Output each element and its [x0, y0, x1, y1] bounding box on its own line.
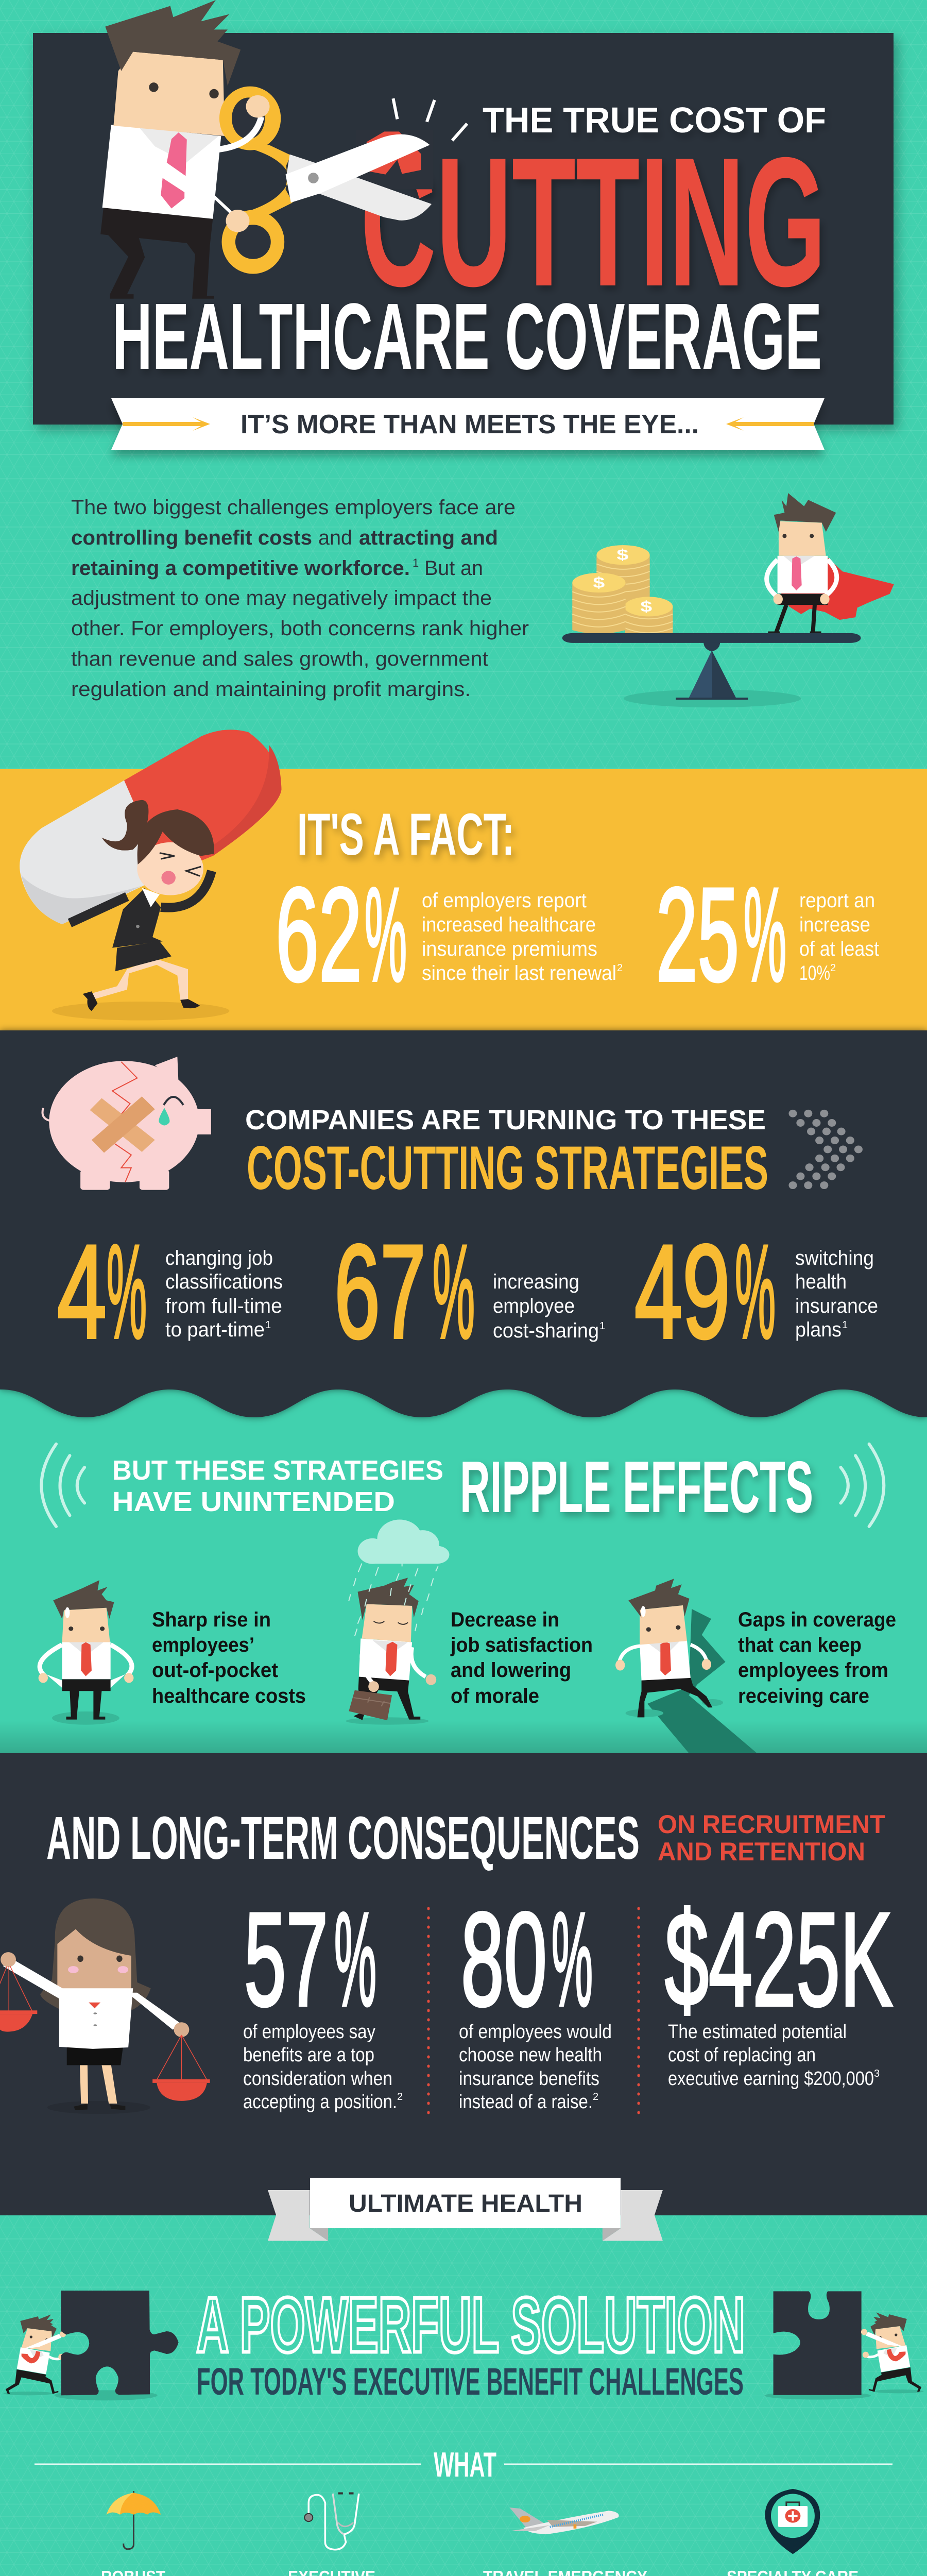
intro text block: controlling benefit costs [71, 527, 312, 549]
text: $425K description: 3 [874, 2068, 880, 2079]
panel: cost-cutting strategies [0, 1030, 927, 1417]
panel: ripple effects [0, 1444, 927, 1753]
text: decrease in job satisfaction: Decrease in [451, 1608, 559, 1631]
icon: broken piggy bank [42, 1057, 211, 1190]
text: sharp rise [152, 1608, 306, 1707]
icon: seesaw scale [562, 633, 861, 700]
text: 67% description: increasing [493, 1270, 579, 1293]
shading at section bottom [0, 1721, 927, 1753]
text: decrease in job satisfaction [450, 1608, 593, 1707]
text: 67% description [493, 1270, 605, 1342]
text: sharp rise: healthcare costs [152, 1685, 306, 1707]
panel: cost-cutting strategies: % [433, 1217, 475, 1366]
text: 25% description: of at least [799, 938, 879, 960]
icon: specialty care pin [765, 2489, 820, 2554]
icon: ripple arcs right [840, 1444, 884, 1527]
text: sharp rise: Sharp rise in [152, 1608, 271, 1631]
text: 80% description [459, 2021, 612, 2113]
icon: superhero man [767, 493, 894, 633]
heading: on recruitment and retention: AND RETENTION [658, 1837, 865, 1866]
icon: airplane [510, 2507, 619, 2534]
text: decrease in job satisfaction: job satisfaction [450, 1634, 593, 1656]
text: 80% description: instead of a raise. [459, 2091, 593, 2113]
text: 25% description: increase [799, 913, 870, 936]
stat: 62%: 62 [276, 860, 362, 1009]
text: gaps in coverage: employees from [738, 1659, 888, 1682]
intro text block: and [318, 527, 352, 549]
icon: coin stacks: $ [593, 574, 605, 591]
intro text block [71, 496, 529, 701]
intro text block: other. For employers, both concerns rank higher [71, 617, 529, 640]
title line: the true cost of: THE TRUE COST OF [483, 100, 826, 140]
text: 4% description: changing job [165, 1247, 273, 1269]
banner: ultimate health: ULTIMATE HEALTH [349, 2190, 582, 2217]
text: 62% description: since their last renewal [422, 962, 616, 985]
intro text block: adjustment to one may negatively impact the [71, 587, 492, 609]
illustration: man with scissors [100, 0, 467, 299]
illustration: man straddling crack [615, 1579, 757, 1753]
text: $425K description: The estimated potential [668, 2021, 847, 2043]
arrow: right [726, 417, 814, 431]
text: 57% description: accepting a position. [243, 2091, 397, 2113]
icon: stethoscope [304, 2493, 359, 2550]
heading: on recruitment and retention: ON RECRUITMENT [658, 1810, 885, 1839]
intro text block: regulation and maintaining profit margins. [71, 678, 471, 701]
text: 49% description: 1 [842, 1319, 848, 1331]
icon: umbrella [107, 2491, 161, 2549]
icon: coin stacks [572, 545, 673, 635]
icon: dotted chevron arrow [788, 1110, 863, 1189]
text: 4% description: to part-time [165, 1318, 265, 1341]
banner: ultimate health [268, 2178, 663, 2241]
illustration: coins balanced against man on scale [562, 493, 894, 707]
panel: long-term consequences: % [552, 1885, 593, 2033]
text: gaps in coverage: Gaps in coverage [738, 1608, 896, 1631]
text: decrease in job satisfaction: of morale [451, 1685, 539, 1707]
heading: what: WHAT [434, 2445, 496, 2484]
panel: cost-cutting strategies: % [107, 1217, 147, 1366]
intro text block: retaining a competitive workforce. [71, 557, 410, 580]
text: 62% description [422, 889, 623, 985]
arrow: left [123, 417, 210, 431]
ribbon: subtitle [111, 398, 825, 450]
stat: 67%: 67 [334, 1217, 426, 1366]
heading: on recruitment and retention [658, 1810, 885, 1866]
intro text block: The two biggest challenges employers face are [71, 496, 516, 519]
text: 25% description: 2 [830, 962, 836, 974]
text: 49% description: plans [795, 1318, 842, 1341]
stat: 80%: 80 [461, 1885, 547, 2033]
text: 57% description: of employees say [243, 2021, 375, 2043]
heading: it's a fact: IT'S A FACT: [297, 802, 514, 868]
text: 80% description: of employees would [459, 2021, 612, 2043]
text: 62% description: increased healthcare [422, 913, 596, 936]
text: $425K description: cost of replacing an [668, 2044, 816, 2066]
text: gaps in coverage: that can keep [738, 1634, 862, 1656]
text: decrease in job satisfaction: and lowering [451, 1659, 571, 1682]
text: 80% description: insurance benefits [459, 2068, 599, 2090]
text: 4% description: classifications [165, 1270, 283, 1293]
heading: but these strategies: BUT THESE STRATEGIES [112, 1455, 443, 1486]
text: 62% description: insurance premiums [422, 938, 597, 960]
text: 57% description: 2 [397, 2091, 403, 2103]
stat: 4%: 4 [57, 1217, 107, 1366]
text: 49% description: insurance [795, 1295, 878, 1317]
text: 57% description: benefits are a top [243, 2044, 374, 2066]
icon: right puzzle piece with man [764, 2291, 923, 2399]
text: 67% description: cost-sharing [493, 1319, 599, 1342]
intro text block: But an [424, 557, 483, 580]
text: gaps in coverage [738, 1608, 896, 1707]
icon: coin stacks: $ [640, 598, 652, 615]
subtitle text: IT’S MORE THAN MEETS THE EYE... [241, 410, 699, 439]
text: 67% description: employee [493, 1295, 575, 1317]
illustration: woman carrying pill [20, 730, 281, 1021]
stat: 25%: 25 [656, 860, 739, 1009]
icon: coin stacks: $ [616, 547, 628, 564]
illustration: man with empty pockets [39, 1580, 133, 1725]
panel: cost-cutting strategies: % [735, 1217, 776, 1366]
panel: long-term consequences: % [334, 1885, 376, 2033]
heading: companies are turning: COMPANIES ARE TURNING TO THESE [245, 1105, 766, 1136]
text: 57% description [243, 2021, 403, 2113]
text: 67% description: 1 [599, 1320, 605, 1332]
text: 49% description: switching [795, 1247, 874, 1269]
text: 25% description [799, 889, 879, 985]
heading: have unintended: HAVE UNINTENDED [112, 1486, 395, 1517]
illustration: woman holding scales [0, 1899, 210, 2114]
panel: it's a fact: % [744, 860, 786, 1009]
text: $425K description: executive earning $200,000 [668, 2068, 874, 2090]
icon: ripple arcs left [41, 1444, 84, 1527]
intro text block: attracting and [359, 527, 498, 549]
icon: left puzzle piece with man [4, 2291, 179, 2400]
text: 62% description: of employers report [422, 889, 587, 912]
stat: 49%: 49 [634, 1217, 730, 1366]
section: what [35, 2445, 892, 2576]
text: 49% description [795, 1247, 878, 1341]
stat: 57%: 57 [244, 1885, 328, 2033]
text: 80% description: 2 [593, 2091, 598, 2103]
text: $425K description [668, 2021, 880, 2090]
panel: it's a fact: % [365, 860, 407, 1009]
text: 4% description: 1 [265, 1319, 271, 1331]
text: 25% description: 10% [799, 962, 830, 985]
panel: long-term consequences [0, 1753, 927, 2215]
intro text block: 1 [413, 556, 419, 569]
text: 80% description: choose new health [459, 2044, 602, 2066]
text: 62% description: 2 [617, 962, 623, 974]
text: gaps in coverage: receiving care [738, 1685, 869, 1707]
text: 57% description: consideration when [243, 2068, 392, 2090]
text: 25% description: report an [799, 889, 875, 912]
panel: ultimate health solution background [0, 2215, 927, 2576]
text: 4% description [165, 1247, 283, 1341]
background: teal patterned top [0, 0, 927, 773]
header panel [33, 0, 894, 425]
intro text block: than revenue and sales growth, government [71, 648, 488, 670]
text: sharp rise: out-of-pocket [152, 1659, 278, 1682]
ripple section base [0, 1381, 927, 1753]
dark title panel [33, 33, 894, 425]
text: 49% description: health [795, 1270, 847, 1293]
panel: it's a fact [0, 730, 927, 1030]
text: sharp rise: employees’ [152, 1634, 254, 1656]
text: 4% description: from full-time [165, 1295, 282, 1317]
illustration: rain cloud over man with briefcase [346, 1520, 449, 1725]
